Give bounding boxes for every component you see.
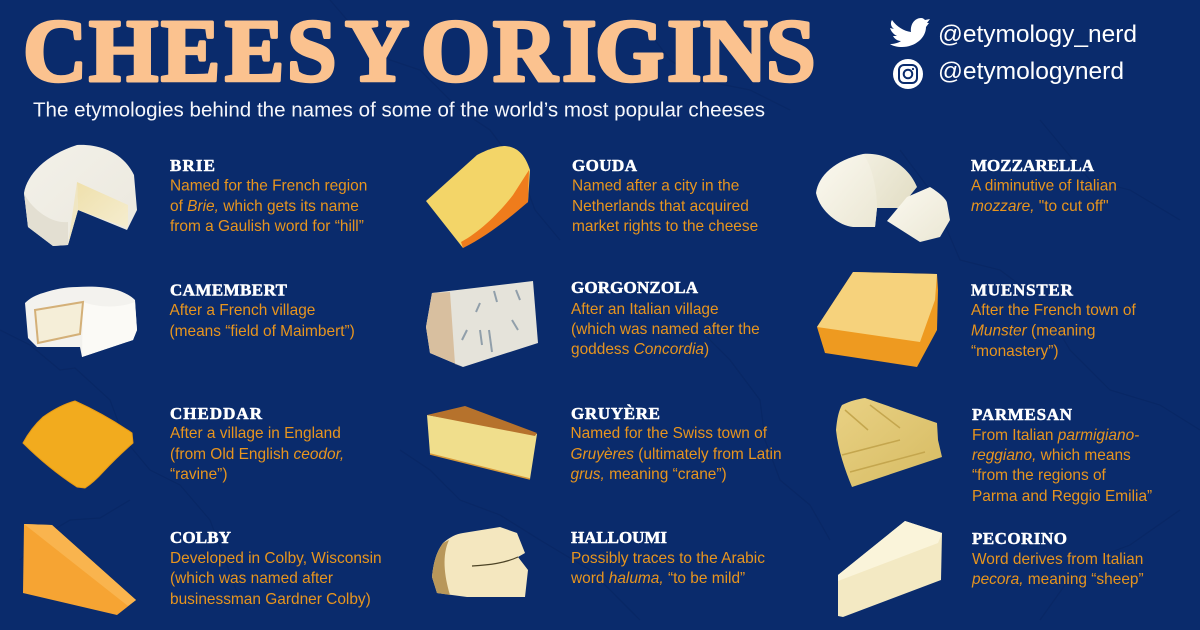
- icon: twitter bird: [890, 18, 930, 47]
- icon: gouda cheese: [426, 146, 530, 248]
- description: Named after a city in the: [572, 178, 739, 194]
- description: [571, 301, 760, 358]
- description: (which was named after the: [571, 321, 760, 338]
- description: [570, 550, 765, 587]
- heading: CAMEMBERT: [170, 281, 287, 299]
- description: Munster (meaning: [971, 322, 1095, 340]
- description: From Italian parmigiano-: [972, 427, 1139, 444]
- description: “ravine”): [170, 466, 227, 483]
- panel: cheddar: [23, 401, 344, 488]
- description: (which was named after: [170, 570, 333, 587]
- description: (means “field of Maimbert”): [170, 323, 355, 340]
- description: [972, 427, 1152, 505]
- panel: colby: [23, 524, 382, 615]
- description: After the French town of: [971, 302, 1136, 319]
- panel: gouda: [426, 146, 758, 248]
- icon: instagram: [893, 59, 923, 89]
- description: [170, 550, 382, 608]
- icon: gruyere cheese: [427, 406, 537, 479]
- heading: BRIE: [170, 156, 215, 175]
- subtitle: The etymologies behind the names of some of the world’s most popular cheeses: [33, 98, 765, 122]
- icon: pecorino cheese: [838, 521, 942, 617]
- description: Gruyères (ultimately from Latin: [570, 446, 782, 463]
- heading: GOUDA: [572, 156, 637, 175]
- description: Possibly traces to the Arabic: [571, 550, 765, 567]
- panel: muenster: [817, 272, 1136, 367]
- description: After a village in England: [170, 425, 341, 442]
- description: [971, 178, 1117, 215]
- icon: colby cheese: [23, 524, 136, 615]
- description: from a Gaulish word for “hill”: [170, 218, 364, 235]
- description: (from Old English ceodor,: [170, 446, 344, 463]
- heading: PECORINO: [972, 529, 1067, 548]
- description: A diminutive of Italian: [971, 178, 1117, 194]
- description: “monastery”): [971, 343, 1058, 360]
- description: [572, 178, 758, 235]
- panel: mozzarella: [816, 154, 1117, 242]
- description: grus, meaning “crane”): [570, 466, 727, 483]
- description: mozzare, "to cut off": [971, 198, 1109, 215]
- description: [971, 551, 1144, 588]
- description: Parma and Reggio Emilia”: [972, 488, 1152, 505]
- description: “from the regions of: [972, 467, 1107, 484]
- social handles: [890, 18, 1137, 89]
- heading: MUENSTER: [971, 281, 1074, 299]
- description: After an Italian village: [571, 301, 719, 318]
- description: [570, 425, 782, 483]
- heading: HALLOUMI: [571, 528, 667, 547]
- icon: muenster cheese: [817, 272, 938, 367]
- description: reggiano, which means: [972, 447, 1131, 464]
- panel: camembert: [25, 281, 355, 357]
- heading: GORGONZOLA: [571, 278, 698, 297]
- icon: halloumi cheese: [432, 527, 528, 597]
- panel: halloumi: [432, 527, 765, 597]
- description: [170, 425, 344, 483]
- panel: pecorino: [838, 521, 1144, 617]
- heading: COLBY: [170, 528, 231, 547]
- handle: instagram: @etymologynerd: [938, 58, 1124, 85]
- heading: PARMESAN: [972, 405, 1072, 424]
- heading: MOZZARELLA: [971, 156, 1094, 175]
- heading: CHEDDAR: [170, 404, 263, 423]
- panel: brie: [24, 145, 367, 246]
- heading: GRUYÈRE: [571, 404, 660, 423]
- description: pecora, meaning “sheep”: [971, 571, 1144, 588]
- icon: gorgonzola cheese: [426, 281, 538, 367]
- icon: brie cheese: [24, 145, 137, 246]
- description: word haluma, “to be mild”: [570, 570, 745, 587]
- icon: mozzarella cheese: [816, 154, 950, 242]
- description: Named for the French region: [170, 178, 367, 194]
- panel: gorgonzola: [426, 278, 760, 367]
- panel: parmesan: [836, 398, 1152, 505]
- description: Netherlands that acquired: [572, 198, 749, 215]
- panel: gruyere: [427, 404, 782, 483]
- icon: parmesan cheese: [836, 398, 942, 487]
- description: [971, 302, 1136, 360]
- title: CHEESY ORIGINS: [23, 2, 816, 100]
- handle: twitter: @etymology_nerd: [938, 21, 1137, 48]
- description: of Brie, which gets its name: [170, 198, 359, 215]
- description: Named for the Swiss town of: [570, 425, 768, 442]
- description: [170, 302, 355, 340]
- icon: cheddar cheese: [23, 401, 133, 488]
- description: goddess Concordia): [571, 341, 709, 358]
- description: Developed in Colby, Wisconsin: [170, 550, 382, 567]
- description: market rights to the cheese: [572, 218, 758, 235]
- description: businessman Gardner Colby): [170, 591, 371, 608]
- description: After a French village: [170, 302, 315, 319]
- description: Word derives from Italian: [972, 551, 1143, 568]
- icon: camembert cheese: [25, 287, 137, 357]
- description: [170, 178, 367, 235]
